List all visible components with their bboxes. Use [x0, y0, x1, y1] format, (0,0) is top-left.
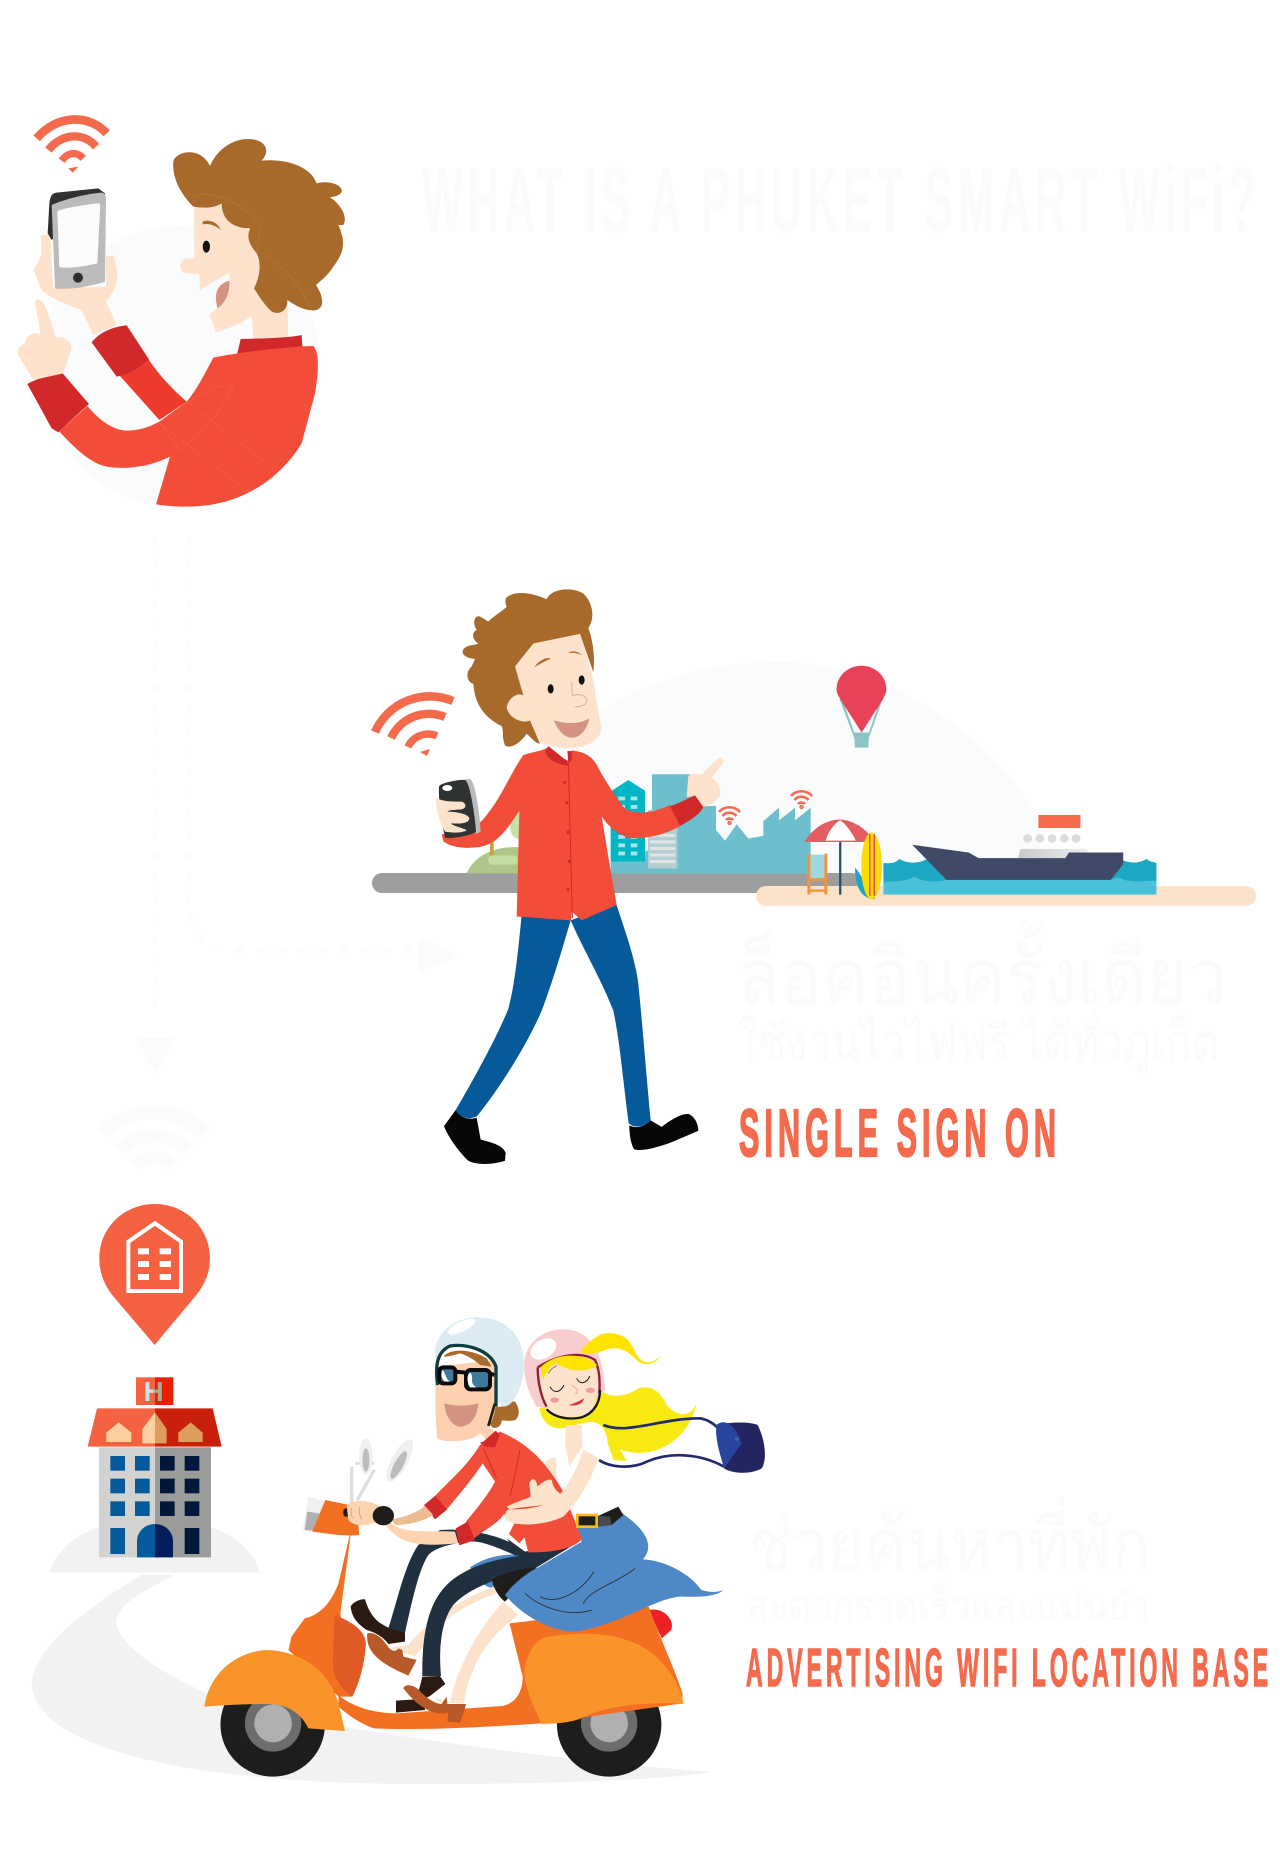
woman's front shoe: [403, 1685, 466, 1723]
panel: walking man: [442, 589, 723, 1164]
man's trousers: [388, 1530, 582, 1676]
woman's top: [545, 1422, 608, 1510]
back forearm: [392, 1506, 433, 1525]
boat: [912, 815, 1123, 880]
facial features: [534, 651, 589, 738]
man's shoes: [351, 1599, 445, 1713]
man's shirt: [434, 1432, 582, 1552]
collar: [480, 1431, 500, 1447]
front fender: [204, 1650, 345, 1731]
glasses: [439, 1367, 494, 1389]
panel: riders upper body: [424, 1316, 765, 1552]
hair: [173, 139, 345, 313]
hair: [463, 589, 594, 747]
leg shield: [333, 1615, 366, 1697]
bag: [716, 1422, 765, 1473]
hot air balloon: [837, 666, 886, 748]
man's mouth: [444, 1403, 478, 1427]
panel: man looking at phone: [18, 119, 345, 507]
icon: small wifi left: [719, 807, 740, 824]
icon: tilted wifi: [375, 696, 453, 756]
seams: [159, 194, 312, 492]
tail light: [649, 1609, 672, 1638]
headlight: [303, 1497, 359, 1535]
hill and trees: [467, 811, 520, 873]
panel: riders lower body: [351, 1513, 724, 1723]
pointing hand: [18, 299, 72, 380]
background circle: [39, 226, 321, 507]
shirt: [442, 747, 680, 920]
surfboards: [855, 833, 882, 899]
woman's hair back: [539, 1387, 697, 1461]
collar: [237, 335, 302, 355]
hand on handlebar: [347, 1501, 380, 1525]
eye and brow: [203, 221, 221, 253]
woman's rear shoe: [367, 1633, 417, 1676]
woman's hair front: [541, 1333, 660, 1381]
underside of skirt: [492, 1567, 537, 1602]
icon: map pin: [99, 1204, 210, 1345]
hotel roof: [88, 1408, 222, 1447]
trousers: [456, 903, 651, 1127]
skirt: [505, 1513, 724, 1632]
hotel sign: H: [144, 1376, 164, 1407]
scooter front body: [288, 1527, 352, 1697]
beach chair: [807, 854, 827, 894]
woman's helmet: [524, 1329, 605, 1408]
rear fender: [524, 1634, 684, 1724]
road: [372, 873, 862, 893]
road shadow: [32, 1575, 713, 1784]
phone: [48, 188, 106, 289]
city buildings: [467, 774, 811, 873]
cuff: [670, 795, 703, 826]
back cuff: [92, 325, 149, 377]
icon: faint wifi: [104, 1112, 204, 1165]
cuffs: [424, 1496, 475, 1545]
man's back hair: [490, 1401, 519, 1428]
shirt seams: [483, 1448, 520, 1497]
front forearm: [385, 1520, 458, 1545]
grip: [373, 1506, 394, 1525]
grip stub: [343, 1508, 350, 1517]
thai heading: single sign on: ล็อคอินครั้งเดียว: [737, 921, 1227, 1021]
shoes: [444, 1110, 698, 1164]
mouth: [216, 281, 229, 308]
sea: [883, 859, 1156, 895]
bag straps: [599, 1418, 724, 1467]
hotel sign: [136, 1376, 173, 1407]
teal building: [611, 780, 645, 862]
panel: man's arms and handlebar: [343, 1501, 458, 1545]
woman's face: [538, 1355, 600, 1418]
front cuff: [27, 373, 89, 432]
panel: scooter: [204, 1436, 684, 1777]
arrow right: [419, 938, 460, 973]
man's fringe: [443, 1351, 492, 1367]
umbrella: [804, 820, 875, 895]
thai heading: location: ช่วยค้นหาที่พัก: [749, 1496, 1150, 1586]
face: [507, 634, 601, 748]
phone in walking man's hand: [436, 779, 481, 838]
mirrors: [352, 1436, 418, 1503]
woman's arm and hand: [505, 1450, 598, 1524]
belt: [577, 1507, 623, 1527]
skyline and factory: [611, 774, 811, 873]
grey building: [648, 810, 677, 868]
man's neck and head: [435, 1360, 500, 1443]
arrow down: [136, 1038, 175, 1074]
scooter floor and rear body: [338, 1607, 682, 1729]
placket and buttons: [563, 761, 572, 918]
back arm: [120, 357, 187, 420]
beach, sea, boat, balloon: [804, 666, 1156, 899]
panel: hotel location: [49, 1204, 260, 1573]
thai subheading: location: สะดวกรวดเร็วและแม่นยำ: [746, 1582, 1150, 1629]
pointing hand: [687, 758, 723, 807]
woman's legs: [390, 1587, 518, 1703]
shirt: [59, 346, 318, 507]
panel: city and beach scene: [372, 662, 1256, 906]
dotted path lines: [155, 537, 415, 1020]
face and neck: [180, 203, 288, 338]
scooter wheels: [220, 1673, 661, 1777]
hand holding phone: [33, 234, 117, 335]
man's helmet: [435, 1316, 524, 1426]
mound: [49, 1527, 260, 1573]
background dome: [560, 662, 1040, 873]
icon: wifi signal: [37, 119, 107, 173]
collar: [545, 746, 572, 766]
hotel building: [99, 1447, 211, 1557]
icon: small wifi right: [791, 791, 812, 808]
beach: [756, 886, 1256, 906]
back of skirt: [470, 1555, 518, 1588]
